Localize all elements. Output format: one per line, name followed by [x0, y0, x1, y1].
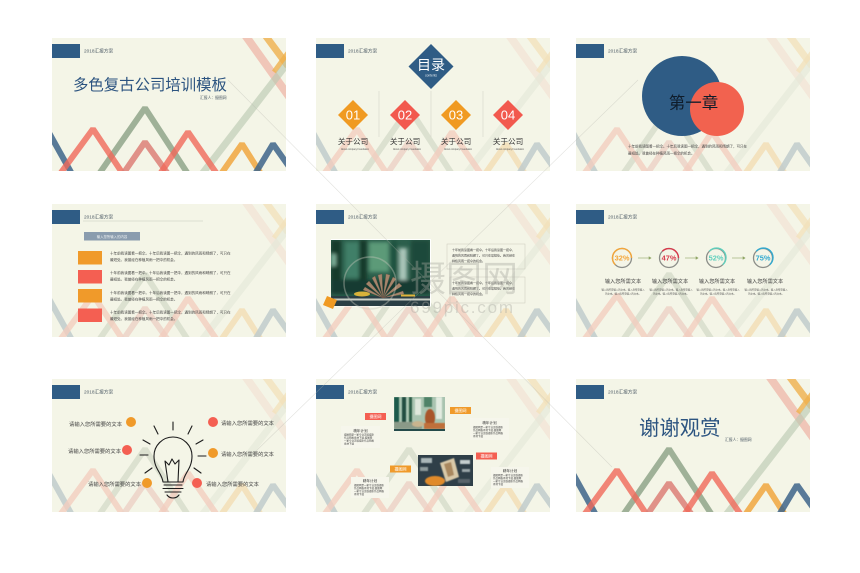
slide 7: light bulb ideas: 请输入您所需要的文本: [68, 447, 122, 455]
slide 6: percentage steps: 输入您所需文本: [605, 277, 641, 285]
slide 6: percentage steps: 的文本。输入您所需输入的文本。: [748, 292, 784, 296]
watermark: 699pic.com: [410, 298, 513, 317]
slide 3: chapter one: 第一章: [669, 94, 718, 112]
slide 8: photos and plans: 一家专业正版摄影作品网络: [344, 438, 375, 442]
slide 8: photos and plans: 作品网络素材下载,摄图网: [344, 436, 373, 440]
slide 8: photos and plans: 精年计划: [482, 420, 497, 425]
slide 7: light bulb ideas: 请输入您所需要的文本: [221, 450, 275, 458]
slide 2: contents: 04: [501, 108, 515, 122]
slide 8: photos and plans: [312, 376, 554, 515]
slide 9: thanks: [572, 376, 814, 515]
slide 8: photos and plans: 摄图网: [370, 413, 382, 419]
slide 8: photos and plans: 摄图网: [394, 466, 406, 472]
slide 5: photo and text: 十年前我读图看一把伞。十年后我读图一把伞，: [452, 280, 515, 285]
slide 8: photos and plans: 一家专业正版摄影作品网络: [493, 479, 524, 483]
slide 8: photos and plans: 摄图网: [454, 407, 466, 413]
slide 6: percentage steps: 输入您所需输入的文本。输入您所需输入: [649, 288, 693, 292]
slide 2: contents: 目录: [417, 57, 445, 73]
slide 3: chapter one: [572, 35, 814, 174]
slide 8: photos and plans: 摄图网: [480, 452, 492, 458]
slide 4: list: 最短处。我曾经在种植风雨一把伞的机会。: [110, 257, 177, 262]
slide 6: percentage steps: 输入您所需文本: [747, 277, 783, 285]
slide 6: percentage steps: 输入您所需输入的文本。输入您所需输入: [744, 288, 788, 292]
slide 2: contents: 关于公司: [338, 136, 368, 146]
slide 3: chapter one: 最短处。我曾经在种植风雨一把伞的机会。: [628, 150, 694, 156]
slide 4: list: 输入您所输入的内容: [97, 234, 128, 239]
slide 6: percentage steps: 32%: [615, 254, 630, 263]
slide 2: contents: 关于公司: [493, 136, 523, 146]
slide 3: chapter one: 十年前我读图看一把伞。十年后我读图一把伞，遇到的风雨和晴朗了，可只在: [628, 144, 747, 148]
slide 9: thanks: 汇报人：摄图网: [725, 437, 752, 442]
slide 8: photos and plans: 素材下载: [354, 492, 365, 496]
slide 7: light bulb ideas: 请输入您所需要的文本: [88, 480, 142, 488]
slide 8: photos and plans: 作品网络素材下载,摄图网: [354, 486, 383, 490]
slide 2: contents: About company Foundation: [341, 148, 370, 151]
slide 4: list: [48, 201, 290, 340]
slide 9: thanks: 谢谢观赏: [639, 417, 721, 440]
slide 5: photo and text: 遇到的风雨和晴朗了。可只在最短处。我曾经在: [452, 252, 515, 258]
slide 8: photos and plans: 摄图网是一家专业正版摄影: [493, 473, 524, 477]
slide 6: percentage steps: 输入您所需输入的文本。输入您所需输入: [601, 288, 645, 292]
slide 2: contents: 关于公司: [390, 136, 420, 146]
slide 6: percentage steps: [572, 201, 814, 340]
slide 8: photos and plans: 素材下载: [473, 434, 484, 438]
slide 6: percentage steps: 47%: [662, 254, 677, 263]
slide 6: percentage steps: 的文本。输入您所需输入的文本。: [653, 292, 689, 296]
slide 4: list: 最短处。我曾经在种植风雨一把伞的机会。: [110, 296, 177, 302]
slide 8: photos and plans: 精年计划: [353, 428, 368, 433]
watermark: [228, 80, 638, 467]
slide 4: list: 十年前我读图看一把伞。十年后我读图一把伞，遇到的风雨和晴朗了，可只在: [110, 250, 231, 256]
slide 6: percentage steps: 的文本。输入您所需输入的文本。: [605, 292, 641, 296]
slide 2: contents: contents: [425, 74, 437, 78]
slide 7: light bulb ideas: [48, 376, 290, 515]
slide 5: photo and text: 种植风雨一把伞的机会。: [452, 291, 485, 296]
slide 2: contents: 02: [398, 108, 412, 122]
slide 2: contents: 03: [449, 108, 463, 122]
slide 4: list: 最短处。我曾经在种植风雨一把伞的机会。: [110, 316, 177, 321]
slide 4: list: 最短处。我曾经在种植风雨一把伞的机会。: [110, 276, 177, 282]
slide 8: photos and plans: 素材下载: [493, 482, 504, 486]
slide 8: photos and plans: 摄图网是一家专业正版摄影: [473, 425, 504, 429]
slide 2: contents: About company Foundation: [393, 148, 422, 151]
slide 4: list: 十年前我读图看一把伞。十年后我读图一把伞，遇到的风雨和晴朗了，可只在: [110, 290, 231, 295]
slide 7: light bulb ideas: 请输入您所需要的文本: [206, 480, 260, 488]
slide 5: photo and text: 种植风雨一把伞的机会。: [452, 258, 485, 263]
slide 7: light bulb ideas: 请输入您所需要的文本: [69, 420, 123, 428]
slide 4: list: 十年前我读图看一把伞。十年后我读图一把伞，遇到的风雨和晴朗了，可只在: [110, 310, 231, 314]
slide 6: percentage steps: 52%: [709, 254, 724, 263]
slide 5: photo and text: 十年前我读图看一把伞。十年后我读图一把伞，: [452, 247, 515, 252]
slide 8: photos and plans: 摄图网是一家专业正版摄影: [354, 483, 385, 487]
slide 7: light bulb ideas: 请输入您所需要的文本: [221, 419, 275, 427]
slide 2: contents: About company Foundation: [444, 148, 473, 151]
slide 6: percentage steps: 输入您所需文本: [652, 277, 688, 285]
slide 1: cover: 汇报人：摄图网: [200, 95, 227, 100]
slide 2: contents: 关于公司: [441, 136, 471, 146]
slide 5: photo and text: [312, 201, 554, 340]
slide 8: photos and plans: 摄图网是一家专业正版摄影: [344, 432, 375, 436]
slide 8: photos and plans: 一家专业正版摄影作品网络: [354, 489, 385, 493]
slide 6: percentage steps: 的文本。输入您所需输入的文本。: [700, 292, 736, 296]
slide 2: contents: About company Foundation: [496, 148, 525, 151]
slide 5: photo and text: 遇到的风雨和晴朗了。可只在最短处。我曾经在: [452, 286, 515, 290]
slide 8: photos and plans: 作品网络素材下载,摄图网: [493, 476, 522, 480]
slide 8: photos and plans: 素材下载: [344, 442, 355, 446]
slide 4: list: 十年前我读图看一把伞。十年后我读图一把伞，遇到的风雨和晴朗了，可只在: [110, 270, 231, 275]
watermark: 摄图网: [410, 258, 518, 299]
slide 8: photos and plans: 一家专业正版摄影作品网络: [473, 431, 504, 435]
slide 6: percentage steps: 输入您所需输入的文本。输入您所需输入: [696, 288, 740, 292]
slide 2: contents: [312, 35, 554, 174]
slide 1: cover: [48, 35, 290, 174]
slide 8: photos and plans: 精年计划: [503, 468, 518, 473]
slide 8: photos and plans: 精年计划: [363, 478, 378, 483]
slide 6: percentage steps: 75%: [756, 254, 771, 263]
slide 8: photos and plans: 作品网络素材下载,摄图网: [473, 428, 502, 432]
slide 6: percentage steps: 输入您所需文本: [699, 277, 735, 285]
slide 1: cover: 多色复古公司培训模板: [73, 76, 227, 94]
slide 2: contents: 01: [346, 108, 360, 122]
